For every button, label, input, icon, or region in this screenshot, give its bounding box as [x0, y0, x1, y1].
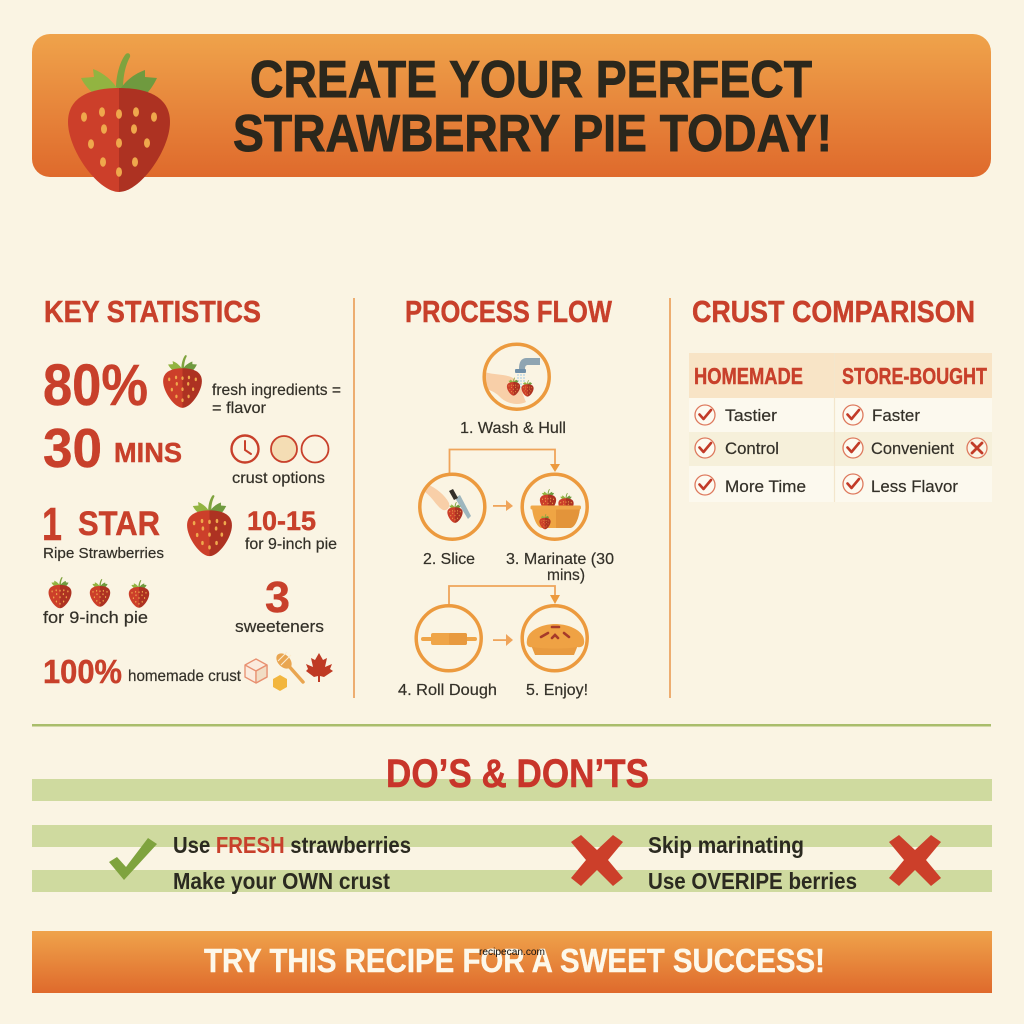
title: [233, 51, 832, 163]
row: more time: More Time: [725, 478, 806, 496]
arrow: roll dough to enjoy connector: [449, 586, 560, 605]
title: STRAWBERRY PIE TODAY!: [233, 105, 832, 163]
call to action banner: [32, 931, 992, 993]
heading: key statistics: KEY STATISTICS: [44, 294, 261, 329]
green bands: [32, 779, 992, 892]
banner background: [32, 931, 992, 993]
label: 3. Marinate (30: [506, 551, 614, 568]
text: make your own crust: Make your OWN crust: [173, 868, 390, 894]
row: less flavor: [843, 474, 959, 496]
label: mins): [547, 567, 585, 584]
text: use overipe berries: Use OVERIPE berries: [648, 868, 857, 894]
header banner: [32, 34, 991, 192]
text: for 9-inch pie: for 9-inch pie: [43, 608, 148, 627]
text: crust options: crust options: [232, 470, 325, 487]
stat: 1 star: 1: [42, 498, 62, 550]
row: convenient: Convenient: [871, 440, 954, 458]
row: tastier: [695, 405, 778, 425]
icon: honey dipper: [273, 650, 303, 691]
step 5: enjoy: [522, 606, 588, 699]
stat: 3: 3: [265, 573, 290, 622]
icon: sugar cube: [245, 659, 267, 683]
icon: strawberry: [187, 495, 232, 556]
panel: key statistics: [42, 294, 341, 691]
text: skip marinating: Skip marinating: [648, 832, 804, 858]
call to action text: TRY THIS RECIPE FOR A SWEET SUCCESS!: [204, 942, 825, 979]
stat: 1 star: [42, 498, 160, 550]
arrow: slice to marinate: [493, 500, 513, 511]
step 1: wash and hull: [460, 344, 566, 437]
icon: crust option circles: [271, 436, 328, 462]
stat: 80 percent: 80%: [43, 353, 148, 418]
panel: process flow: [398, 294, 614, 699]
banner background: [32, 34, 991, 177]
icon: red cross: [889, 835, 941, 886]
icon: clock: [232, 436, 258, 462]
row: convenient: [843, 438, 954, 458]
icon: slicing strawberry: [420, 474, 485, 539]
icon: green check: [109, 838, 157, 880]
text: homemade crust: homemade crust: [128, 668, 242, 685]
row: more time: [695, 475, 806, 496]
row: faster: [843, 405, 921, 425]
icon: red cross badge: [967, 438, 987, 458]
stat: 1 star: STAR: [78, 505, 160, 543]
label: 2. Slice: [423, 551, 475, 568]
icon: maple leaf: [306, 653, 333, 682]
stat: 30 mins: 30: [43, 417, 102, 479]
step 2: slice: [420, 474, 485, 568]
icon: pie: [522, 606, 587, 671]
step 3: marinate: [506, 474, 614, 584]
label: [506, 551, 614, 584]
text: ripe strawberries: Ripe Strawberries: [43, 545, 164, 562]
stat: 100 percent: 100%: [43, 653, 122, 690]
icon: large strawberry: [68, 53, 170, 192]
heading: do's and don'ts: DO’S & DON’TS: [386, 752, 649, 796]
row: control: Control: [725, 440, 779, 458]
icon: strawberry: [163, 355, 202, 408]
row: less flavor: Less Flavor: [871, 478, 959, 496]
text: fresh ingredients: = flavor: [212, 400, 267, 417]
comparison table: [689, 353, 992, 502]
stat: 30 mins: [43, 417, 182, 479]
column header: store-bought: STORE-BOUGHT: [842, 363, 987, 389]
arrow: roll dough to enjoy: [493, 634, 513, 646]
title: CREATE YOUR PERFECT: [250, 51, 812, 109]
panel: crust comparison: [689, 294, 992, 502]
arrow: slice to marinate connector: [450, 450, 560, 473]
icon: washing strawberries: [484, 344, 549, 409]
stat: 10-15: 10-15: [247, 506, 316, 536]
watermark: recipecan.com: [479, 947, 545, 958]
row: control: [695, 438, 779, 458]
label: 4. Roll Dough: [398, 682, 497, 699]
label: 1. Wash & Hull: [460, 420, 566, 437]
panel: do's and don'ts: [32, 752, 992, 894]
stat: 30 mins: MINS: [114, 437, 182, 468]
row: tastier: Tastier: [725, 407, 778, 425]
icon: bowl of strawberries: [522, 474, 587, 539]
label: 5. Enjoy!: [526, 682, 588, 699]
icon: red cross: [571, 835, 623, 886]
icon: rolling pin: [416, 606, 481, 671]
text: fresh ingredients: [212, 382, 341, 417]
step 4: roll dough: [398, 606, 497, 699]
icon: three strawberries: [49, 577, 149, 608]
heading: crust comparison: CRUST COMPARISON: [692, 294, 975, 329]
text: use fresh strawberries: Use FRESH strawberries: [173, 832, 411, 858]
text: sweeteners: sweeteners: [235, 617, 324, 636]
column header: homemade: HOMEMADE: [694, 363, 803, 389]
text: for 9-inch pie: for 9-inch pie: [245, 536, 337, 553]
row: faster: Faster: [872, 407, 921, 425]
text: fresh ingredients: fresh ingredients =: [212, 382, 341, 399]
heading: process flow: PROCESS FLOW: [405, 294, 613, 329]
